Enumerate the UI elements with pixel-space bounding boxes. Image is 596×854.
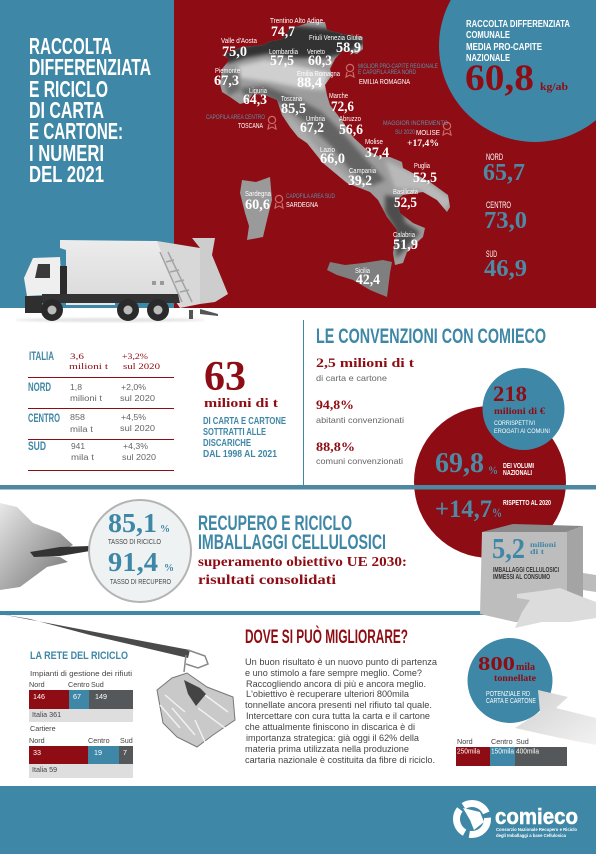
text block: body: cartaria nazionale è costituita da fibre di riciclo.	[245, 755, 435, 766]
title: I NUMERI	[29, 140, 104, 166]
stat: +14,7%: %	[492, 505, 502, 520]
row: Nord: sul 2020	[120, 393, 155, 403]
chart: potenziale per area: 400mila	[516, 746, 539, 756]
region: Calabria: 51,9	[393, 237, 418, 253]
stat: 2,5 milioni di t: 2,5 milioni di t	[316, 355, 415, 370]
row: Sud: sul 2020	[122, 452, 156, 462]
region: Puglia	[413, 163, 437, 186]
row: Sud: mila t	[71, 452, 95, 462]
row: Sud	[28, 439, 156, 462]
region: Campania: Campania	[349, 168, 376, 175]
illustration: box held by hands: milioni	[530, 540, 556, 549]
stat: 63 milioni di t: 63	[204, 354, 246, 400]
truck: wheels	[41, 299, 169, 321]
map of Italy	[220, 22, 452, 297]
hand: lower	[515, 588, 596, 628]
truck: cab rear	[60, 266, 67, 294]
stat: Nord: NORD	[486, 152, 503, 163]
illustration: box held by hands: di t	[530, 547, 545, 556]
text block: body: materia prima utilizzata nella produzione	[245, 744, 409, 755]
bar chart: impianti: 149	[95, 692, 107, 701]
stat: 88,8%: 88,8%	[316, 440, 355, 454]
illustration: hand with magnifier: 91,4	[108, 547, 158, 577]
text block: body: Un buon risultato è un nuovo punto di partenza	[245, 657, 438, 668]
circle: 800 mila tonnellate: CARTA E CARTONE	[486, 698, 536, 705]
region: Marche	[329, 93, 354, 115]
band: blue horizontal rule 2	[0, 611, 596, 615]
chart: la rete del riciclo: LA RETE DEL RICICLO	[30, 650, 128, 662]
region: Campania: 39,2	[348, 173, 372, 189]
illustration: box held by hands	[480, 524, 596, 628]
circle: 800 mila tonnellate: tonnellate	[494, 674, 536, 684]
stat: 88,8%: comuni convenzionati	[316, 456, 403, 466]
row: Centro	[28, 411, 155, 434]
region: Friuli Venezia Giulia: 58,9	[336, 40, 361, 56]
illustration: hand with magnifier: %	[160, 523, 170, 535]
region: Abruzzo: Abruzzo	[339, 116, 361, 123]
callout: Toscana: TOSCANA	[238, 121, 263, 130]
text block: body: importanza strategica: già oggi il 62% della	[246, 733, 420, 744]
region: Veneto: Veneto	[307, 49, 325, 56]
stat: 69,8%: NAZIONALI	[503, 470, 532, 477]
region: Sicilia: Sicilia	[355, 268, 370, 275]
illustration: hand with magnifier: %	[164, 562, 174, 574]
region: Trentino Alto Adige	[270, 18, 323, 40]
callout: Emilia Romagna: E CAPOFILA AREA NORD	[358, 70, 417, 76]
stat: 94,8%: 94,8%	[316, 398, 354, 412]
text block: body: Intercettare con cura tutta la carta e il cartone	[246, 711, 430, 722]
callout: Sardegna: CAPOFILA AREA SUD	[286, 194, 336, 200]
stat: 63 milioni di t: DI CARTA E CARTONE	[203, 415, 286, 427]
region: Lombardia	[269, 49, 298, 69]
illustration: hand with magnifier: 85,1	[108, 508, 157, 538]
row: Nord: +2,0%	[121, 382, 146, 392]
truck: tailgate	[192, 238, 228, 304]
row: Centro: +4,5%	[121, 412, 146, 422]
text block: body: tonnellate ancora presenti nel rifiuto tal quale.	[245, 700, 432, 711]
logo: comieco	[456, 804, 578, 838]
truck illustration	[15, 238, 228, 322]
region: Trentino Alto Adige: 74,7	[271, 24, 295, 40]
region: Abruzzo	[339, 116, 363, 138]
callout: Molise: MAGGIOR INCREMENTO	[383, 121, 448, 127]
chart: potenziale per area: Centro	[491, 737, 513, 746]
bar chart: cartiere: Italia 59	[32, 765, 57, 774]
callout: Emilia Romagna: MIGLIOR PRO-CAPITE REGIONALE	[358, 64, 438, 70]
region: Emilia Romagna: 88,4	[297, 75, 322, 91]
region: Liguria: 64,3	[243, 92, 267, 108]
title: E RICICLO	[29, 76, 108, 102]
convention stats	[316, 355, 415, 466]
box: side face	[567, 526, 583, 622]
row: Centro: CENTRO	[28, 411, 60, 425]
bar chart: impianti: Centro	[68, 680, 90, 689]
circle: 218 milioni di euro: 218	[493, 381, 527, 406]
heading: recupero e riciclo: IMBALLAGGI CELLULOSICI	[198, 531, 386, 554]
region: Lombardia: 57,5	[270, 53, 294, 69]
row: Centro: sul 2020	[120, 423, 155, 433]
bar chart: impianti: 67	[73, 692, 81, 701]
circle: 218 milioni di euro: milioni di €	[494, 407, 545, 417]
region: Lazio: 66,0	[320, 151, 345, 167]
icon: rosette	[268, 116, 276, 129]
region: Liguria: Liguria	[249, 88, 267, 95]
panel: map background	[174, 0, 596, 308]
circle: media pro-capite nazionale	[439, 0, 596, 142]
truck: panel marks	[152, 281, 164, 285]
row: Italia: ITALIA	[29, 349, 54, 363]
footer band	[0, 786, 596, 854]
stat: 88,8%	[316, 440, 403, 466]
chart: potenziale per area: 250mila	[457, 746, 480, 756]
truck: chassis	[42, 294, 180, 303]
circle: 800 mila tonnellate	[468, 638, 552, 723]
row: Italia: milioni t	[69, 361, 109, 371]
region: Basilicata: Basilicata	[393, 189, 418, 196]
region: Piemonte: 67,3	[214, 73, 239, 89]
row: Italia: 3,6	[70, 351, 85, 361]
callout: Emilia Romagna	[346, 64, 438, 86]
panel: title background	[0, 0, 174, 308]
circle: 800 mila tonnellate: mila	[516, 662, 535, 673]
heading: recupero e riciclo: RECUPERO E RICICLO	[198, 512, 352, 535]
bar chart: impianti: 146	[33, 692, 45, 701]
illustration: hand with magnifier: TASSO DI RECUPERO	[110, 577, 171, 586]
bar chart: cartiere: Cartiere	[30, 724, 56, 733]
logo: comieco: Consorzio Nazionale Recupero e Riciclo	[496, 827, 577, 832]
stat: Sud: SUD	[486, 249, 497, 260]
region: Veneto: 60,3	[308, 53, 332, 69]
bar chart: impianti	[29, 669, 133, 722]
arrow: paper arrow	[515, 690, 596, 745]
truck: ladder	[160, 252, 192, 302]
circle: media pro-capite nazionale: kg/ab	[540, 82, 569, 93]
stat: 2,5 milioni di t	[316, 355, 415, 383]
stat: 63 milioni di t: DAL 1998 AL 2021	[203, 448, 277, 460]
callout: Molise: MOLISE	[416, 128, 440, 137]
region: Toscana: Toscana	[281, 96, 302, 103]
arm: right	[583, 573, 596, 592]
illustration: hand with magnifier: TASSO DI RICICLO	[108, 537, 161, 546]
icon: recycle ring	[456, 804, 488, 834]
stat: 2,5 milioni di t: di carta e cartone	[316, 373, 387, 383]
region: Trentino Alto Adige: Trentino Alto Adige	[270, 18, 323, 25]
bar chart: cartiere: 19	[94, 748, 102, 757]
region: Friuli Venezia Giulia	[309, 35, 362, 56]
box: top edge	[482, 524, 583, 532]
truck: cab window	[35, 264, 50, 278]
illustration: crane with paper bale	[0, 614, 235, 747]
text block: body: L'obiettivo è recuperare ulteriori 800mila	[246, 689, 410, 700]
region: Molise	[365, 139, 389, 161]
chart: potenziale per area: 150mila	[491, 746, 514, 756]
region: Puglia: Puglia	[414, 163, 430, 170]
circle: media pro-capite nazionale: COMUNALE	[466, 29, 510, 41]
bar chart: cartiere: 7	[123, 748, 127, 757]
divider line	[303, 320, 304, 485]
circle: 218 milioni di euro	[482, 368, 564, 450]
stat: Sud: 46,9	[484, 256, 527, 282]
stat: 94,8%	[316, 398, 404, 425]
truck: cab	[24, 257, 62, 296]
map: Sardinia	[240, 177, 272, 240]
magnifier lens	[89, 500, 191, 602]
magnifier handle	[30, 546, 90, 557]
chart: la rete del riciclo	[29, 650, 133, 778]
region: Basilicata: 52,5	[394, 195, 417, 211]
callout: Molise: SU 2020	[395, 130, 416, 136]
title: DIFFERENZIATA	[29, 54, 151, 80]
text block: body: e uno stimolo a fare sempre meglio. Come?	[245, 668, 422, 679]
illustration: box held by hands: IMBALLAGGI CELLULOSICI	[493, 567, 559, 574]
callout: Sardegna: SARDEGNA	[286, 200, 318, 209]
map: Sicily	[327, 260, 392, 297]
bale shadow	[184, 680, 206, 706]
row: Sud: SUD	[28, 439, 46, 453]
circle: 218 milioni di euro: EROGATI AI COMUNI	[494, 428, 550, 435]
truck: ground shadow	[15, 318, 205, 322]
chart: potenziale per area: Nord	[457, 737, 473, 746]
band: blue horizontal rule 1	[0, 485, 596, 490]
title: E CARTONE:	[29, 118, 123, 144]
paper bale	[157, 673, 235, 747]
region: Abruzzo: 56,6	[339, 122, 363, 138]
stat: +14,7%: +14,7	[435, 496, 492, 523]
region: Campania	[348, 168, 376, 189]
box: front face	[480, 532, 567, 622]
row: Centro: 858	[70, 412, 85, 422]
bar chart: cartiere: Centro	[88, 736, 110, 745]
row: Nord	[28, 380, 155, 403]
stat: 63 milioni di t: milioni di t	[204, 395, 279, 410]
region: Marche: 72,6	[331, 99, 354, 115]
bar chart: impianti: Sud	[91, 680, 104, 689]
region: Emilia Romagna: Emilia Romagna	[297, 71, 340, 78]
hand	[0, 503, 73, 590]
callout: Molise: +17,4%	[407, 138, 439, 148]
callout: Emilia Romagna: EMILIA ROMAGNA	[359, 77, 410, 86]
title	[29, 33, 151, 187]
stat: +14,7%: RISPETTO AL 2020	[503, 500, 551, 507]
row: Italia: +3,2%	[122, 351, 149, 361]
regional labels	[214, 18, 437, 288]
row: Nord: milioni t	[70, 393, 103, 403]
callout: Sardegna	[275, 194, 336, 209]
truck: container	[60, 240, 178, 295]
region: Sardegna: Sardegna	[245, 191, 271, 198]
callout: Molise	[383, 121, 451, 148]
circle: media pro-capite nazionale: NAZIONALE	[466, 52, 510, 64]
bar chart: cartiere	[29, 724, 133, 778]
circle: media pro-capite nazionale: MEDIA PRO-CAPITE	[466, 41, 542, 53]
text block: body: che attualmente finiscono in discarica è di	[245, 722, 415, 733]
stat: Centro: 73,0	[484, 208, 527, 234]
region: Puglia: 52,5	[413, 170, 437, 186]
region: Calabria: Calabria	[393, 232, 415, 239]
icon: rosette	[346, 64, 354, 77]
crane arm	[0, 614, 190, 658]
heading: recupero e riciclo: superamento obiettivo UE 2030:	[198, 554, 407, 569]
bar chart: impianti: Nord	[29, 680, 45, 689]
region: Piemonte: Piemonte	[215, 68, 240, 75]
stat: 63 milioni di t: DISCARICHE	[203, 437, 251, 449]
logo: comieco: degli Imballaggi a base Cellulosica	[496, 833, 566, 838]
region: Umbria: Umbria	[306, 116, 325, 123]
row: Nord: 1,8	[70, 382, 82, 392]
stat: 69,8%: 69,8	[435, 447, 484, 479]
stat: 63 milioni di t: SOTTRATTI ALLE	[203, 426, 266, 438]
stat: +14,7%	[435, 496, 551, 523]
bar chart: impianti: Impianti di gestione dei rifiuti	[30, 669, 132, 678]
stat: Centro: CENTRO	[486, 200, 511, 211]
row: Centro: mila t	[70, 424, 94, 434]
heading: dove si può migliorare: DOVE SI PUÒ MIGLIORARE?	[245, 626, 408, 648]
region: Emilia Romagna	[297, 71, 340, 91]
region: Basilicata	[393, 189, 418, 211]
bar chart: cartiere: 33	[33, 748, 41, 757]
row: Sud: +4,3%	[123, 441, 148, 451]
row: Italia	[29, 349, 161, 371]
stat: 94,8%: abitanti convenzionati	[316, 415, 404, 425]
bale shredded paper	[160, 695, 228, 742]
title: DI CARTA	[29, 97, 104, 123]
region: Lombardia: Lombardia	[269, 49, 298, 56]
crane hook	[184, 650, 208, 672]
stat: 69,8%: DEI VOLUMI	[503, 463, 534, 470]
callout: Toscana	[206, 115, 276, 130]
truck: hopper	[157, 241, 200, 308]
logo: comieco: comieco	[495, 804, 578, 829]
title: RACCOLTA	[29, 33, 112, 59]
region: Valle d'Aosta: Valle d'Aosta	[221, 38, 257, 45]
region: Umbria: 67,2	[300, 120, 324, 136]
region: Toscana: 85,5	[281, 101, 306, 117]
region: Friuli Venezia Giulia: Friuli Venezia Giulia	[309, 35, 362, 42]
chart: potenziale per area	[456, 737, 567, 766]
table: raccolta per area	[28, 349, 174, 470]
region: Molise: Molise	[365, 139, 383, 146]
region: Valle d'Aosta: 75,0	[222, 44, 247, 60]
row: Nord: NORD	[28, 380, 51, 394]
text block: body: Raccogliendo ancora di più e ancora meglio.	[246, 679, 426, 690]
truck: side rail	[66, 303, 115, 305]
region: Molise: 37,4	[365, 145, 389, 161]
circle: red volumes	[414, 406, 566, 558]
icon: rosette	[275, 195, 283, 208]
stat: Nord: 65,7	[483, 160, 525, 186]
heading: recupero e riciclo	[198, 512, 407, 587]
map: peninsula	[220, 22, 452, 265]
bar chart: impianti: Italia 361	[32, 710, 61, 719]
stat: 69,8%	[435, 447, 534, 479]
illustration: hand with magnifier	[0, 500, 191, 602]
region: Marche: Marche	[329, 93, 348, 100]
circle: 800 mila tonnellate: POTENZIALE RD	[486, 691, 530, 698]
bar chart: cartiere: Sud	[120, 736, 133, 745]
illustration: box held by hands: IMMESSI AL CONSUMO	[493, 574, 550, 581]
illustration: box held by hands: 5,2	[492, 533, 525, 565]
row: Sud: 941	[71, 441, 85, 451]
region: Lazio: Lazio	[320, 147, 335, 154]
stat: 63 milioni di t	[203, 354, 286, 460]
icon: rosette	[443, 122, 451, 135]
circle: 800 mila tonnellate: 800	[478, 653, 515, 675]
chart: potenziale per area: Sud	[516, 737, 529, 746]
callout: Toscana: CAPOFILA AREA CENTRO	[206, 115, 265, 121]
truck: bumper	[25, 296, 42, 313]
region: Valle d'Aosta	[221, 38, 257, 60]
circle: media pro-capite nazionale: 60,8	[465, 58, 534, 99]
region: Sardegna: 60,6	[245, 197, 270, 213]
stat: 69,8%: %	[488, 463, 498, 477]
text block: body	[245, 657, 438, 766]
circle: 218 milioni di euro: CORRISPETTIVI	[494, 420, 535, 427]
bar chart: cartiere: Nord	[29, 736, 45, 745]
title: DEL 2021	[29, 161, 104, 187]
truck: rear step	[189, 309, 218, 319]
heading: recupero e riciclo: risultati consolidati	[198, 572, 336, 587]
row: Italia: sul 2020	[123, 361, 161, 371]
region: Sicilia: 42,4	[356, 272, 380, 288]
